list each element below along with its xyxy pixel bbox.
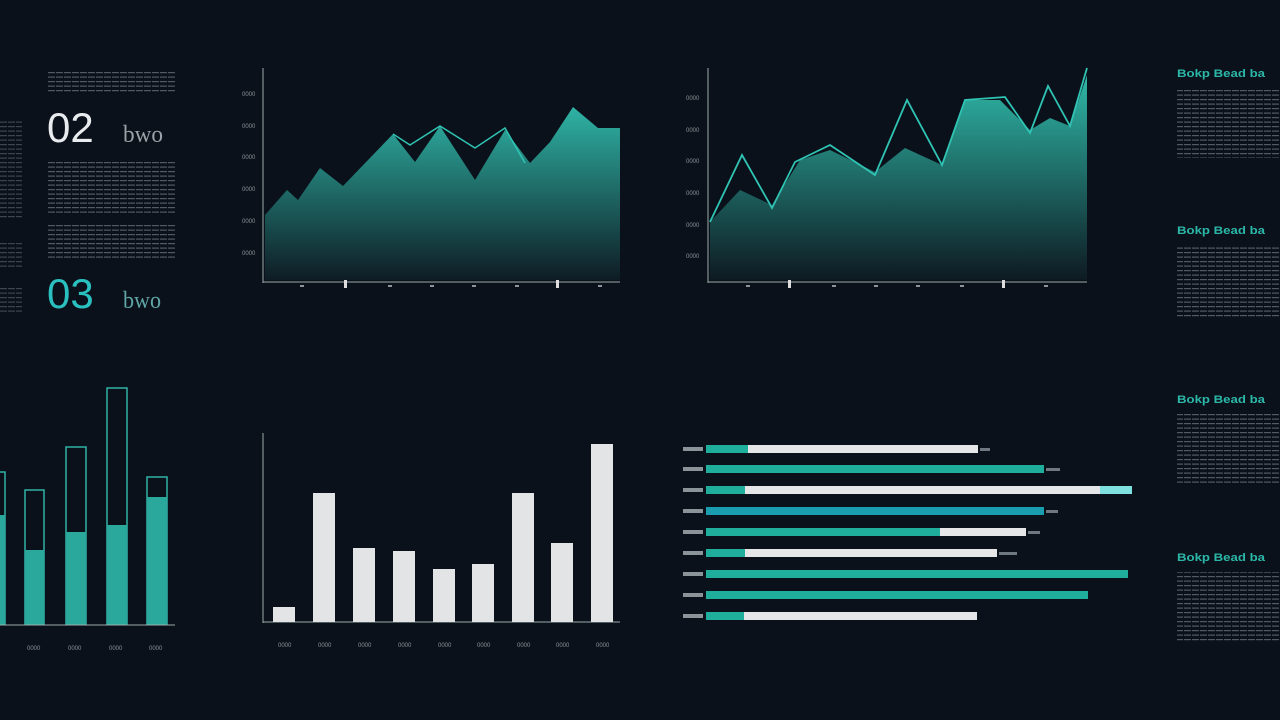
chart: area chart 1: 0000 [242,155,256,161]
chart: area chart 1: 0000 [242,251,256,257]
stat 02: bwo [123,122,163,148]
chart: outlined bars: 0000 [27,646,41,652]
panel: left stats [0,70,175,317]
stat 03: 03 [47,270,94,317]
chart: area chart 1: 0000 [242,187,256,193]
chart: white bars: 0000 [398,643,412,649]
chart: outlined bars: 0000 [149,646,163,652]
text block 4 [1177,552,1280,642]
chart: white bars: 0000 [278,643,292,649]
chart: horizontal bars [683,445,1132,620]
chart: area chart 2: 0000 [686,159,700,165]
chart: area chart 2: 0000 [686,254,700,260]
text block 4: Bokp Bead ba [1177,552,1266,564]
chart: area chart 2 [686,68,1087,288]
chart: white bars: 0000 [318,643,332,649]
chart: white bars: 0000 [477,643,491,649]
chart: white bars: 0000 [358,643,372,649]
stat 02: 02 [47,104,94,151]
chart: white bars: 0000 [438,643,452,649]
chart: area chart 1 [242,68,620,288]
chart: outlined bars [0,388,175,652]
chart: area chart 2: 0000 [686,223,700,229]
stat 03 [47,270,161,317]
chart: area chart 2: 0000 [686,128,700,134]
text block 2 [1177,225,1280,317]
chart: white bars: 0000 [556,643,570,649]
text block 3: Bokp Bead ba [1177,394,1266,406]
chart: white bars: 0000 [596,643,610,649]
chart: area chart 2: 0000 [686,191,700,197]
stat 02 [47,104,163,151]
chart: area chart 1: 0000 [242,92,256,98]
stat 03: bwo [123,288,161,314]
chart: outlined bars: 0000 [109,646,123,652]
chart: white bars [263,433,620,649]
text block 3 [1177,394,1280,485]
panel: right text blocks [1177,68,1280,642]
text block 1: Bokp Bead ba [1177,68,1266,80]
chart: area chart 2: 0000 [686,96,700,102]
chart: white bars: 0000 [517,643,531,649]
text block 2: Bokp Bead ba [1177,225,1266,237]
chart: area chart 1: 0000 [242,219,256,225]
text block 1 [1177,68,1280,158]
chart: outlined bars: 0000 [68,646,82,652]
chart: area chart 1: 0000 [242,124,256,130]
